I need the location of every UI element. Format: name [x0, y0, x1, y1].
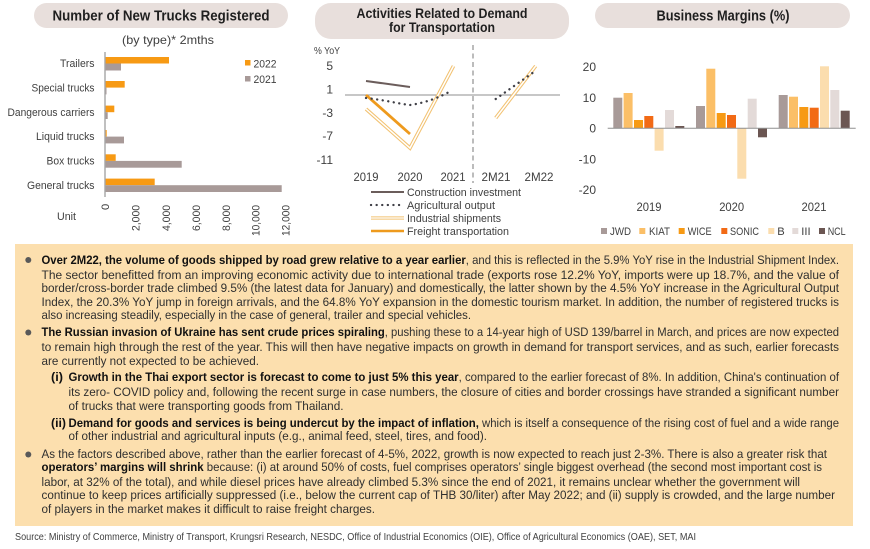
sub-point ii: inflation: (ii): [51, 416, 66, 430]
legend: margins: WICE: [688, 226, 712, 238]
heading: Activities Related to Demand for Transportation: [315, 3, 569, 39]
line chart: activities: 2M21: [482, 170, 511, 184]
bullet 3: growth outlook and margins: [25, 447, 835, 516]
bullet 1: road freight volume: Index, the 20.3% YoY jump in foreign arrivals, and the 64.8% YoY expansion in the domestic tourism market. In addition, the number of registered trucks is: [42, 295, 839, 309]
line chart: activities: 2019: [354, 170, 379, 184]
heading: Business Margins: [595, 3, 850, 28]
heading: Activities Related to Demand for Transportation: for Transportation: [389, 20, 495, 35]
bar chart: margins: 2019: [636, 200, 662, 214]
bar chart: trucks by type: Special trucks: [32, 82, 95, 94]
bar chart: margins: 2020: [719, 200, 744, 214]
sub-point ii: inflation: Demand for goods and services is being undercut by the impact of inflation, which is itself a consequence of the rising cost of fuel and a wide range: [68, 416, 839, 430]
bullet 1: road freight volume: border/cross-border trade climbed 9.5% (the latest data for January) and domestically, the latter shown by the 4.5% YoY increase in the Agricultural Output: [42, 281, 840, 295]
heading: Number of New Trucks Registered: [34, 3, 288, 28]
heading: Number of New Trucks Registered: Number of New Trucks Registered: [52, 8, 270, 24]
bar chart: trucks by type: 2,000: [130, 205, 142, 231]
subtitle: by type: (by type)* 2mths: [122, 33, 214, 47]
source note: Source: Ministry of Commerce, Ministry of Transport, Krungsri Research, NESDC, Office of Industrial Economics (OIE), Office of Agricultural Economics (OAE), SET, MAI: [15, 531, 696, 543]
bar chart: margins: 0: [589, 122, 596, 136]
bar chart: trucks by type: Liquid trucks: [36, 131, 95, 143]
bar chart: trucks by type: 0: [100, 204, 112, 210]
bullet 3: growth outlook and margins: continue to keep prices artificially suppressed (i.e., below the current cap of THB 30/liter) after May 2022; and (ii) supply is crowded, and the large number: [42, 488, 835, 502]
panel: new trucks registered: [8, 3, 292, 236]
sub-point ii: inflation: of other industrial and agricultural inputs (e.g., animal feed, steel, tires, and food).: [68, 429, 487, 443]
panel: business margins: [579, 3, 856, 238]
sub-point i: Thai exports: Growth in the Thai export sector is forecast to come to just 5% this year, compared to the earlier forecast of 8%. In addition, China's continuation of: [68, 370, 840, 384]
legend: margins: JWD: [610, 226, 631, 238]
series: construction investment: [366, 81, 410, 87]
bar chart: trucks by type: 8,000: [221, 205, 233, 231]
bullet 2: Russian invasion and crude prices: to remain high through the rest of the year. This will then have negative impacts on growth in demand for transport services, and as such, earlier forecasts: [42, 340, 839, 354]
heading: Business Margins: Business Margins (%): [656, 8, 790, 24]
bar chart: trucks by type: [8, 52, 292, 236]
line chart: activities: 2021: [440, 170, 466, 184]
bar chart: margins: -20: [579, 183, 596, 197]
sub-point i: Thai exports: (i): [51, 370, 63, 384]
panel: commentary text: [15, 244, 853, 526]
bar chart: margins: 2021: [802, 200, 827, 214]
line chart: activities: 2M22: [524, 170, 554, 184]
panel: activities related to demand: [314, 3, 569, 238]
legend: activities: Freight transportation: [407, 226, 509, 238]
bullet 1: road freight volume: [25, 253, 840, 322]
bullet 3: growth outlook and margins: As the factors described above, rather than the earlier forecast of 4-5%, 2022, growth is now expected to reach just 2-3%. There is also a greater risk that: [42, 447, 828, 461]
bar chart: trucks by type: 10,000: [250, 205, 262, 236]
bar chart: trucks by type: 6,000: [191, 205, 203, 231]
bullet 2: Russian invasion and crude prices: are currently not expected to be achieved.: [42, 354, 259, 368]
line chart: activities: % YoY: [314, 46, 340, 57]
bullet 3: growth outlook and margins: operators’ margins will shrink because: (i) at around 50% of costs, fuel comprises operators’ single biggest overhead (the second most important cost is: [42, 460, 822, 474]
legend: trucks years: [245, 58, 276, 86]
bullet 3: growth outlook and margins: labor, at 32% of the total), and while diesel prices have already climbed 5.3% since the end of 2021, it remains unclear whether the government will: [42, 475, 800, 489]
line chart: activities: -7: [322, 129, 333, 143]
line chart: activities: 5: [326, 59, 333, 73]
bar chart: trucks by type: Dangerous carriers: [8, 107, 95, 119]
heading: Activities Related to Demand for Transportation: Activities Related to Demand: [356, 6, 528, 21]
legend: activities: Agricultural output: [407, 200, 496, 212]
bar chart: margins: 20: [583, 60, 596, 74]
bullet 2: Russian invasion and crude prices: [25, 325, 839, 368]
legend: activities: Construction investment: [407, 187, 522, 199]
line chart: activities: [314, 45, 560, 184]
series: industrial shipments: [366, 66, 536, 148]
bullet 1: road freight volume: also increasing steadily, especially in the case of general, trailer and special vehicles.: [42, 308, 471, 322]
bullet 1: road freight volume: The sector benefitted from an improving economic activity due to international trade (exports rose 12.2% YoY, imports were up 18.7%, and the value of: [42, 268, 840, 282]
legend: margins: [601, 226, 846, 238]
bar chart: trucks by type: Box trucks: [46, 156, 95, 168]
line chart: activities: 1: [326, 82, 333, 96]
bar chart: trucks by type: Trailers: [60, 58, 95, 70]
series: freight transportation: [366, 95, 410, 134]
bar chart: trucks by type: Unit: [57, 211, 77, 223]
legend: margins: SONIC: [730, 226, 759, 238]
bar chart: trucks by type: 4,000: [161, 205, 173, 231]
legend: margins: III: [801, 226, 811, 238]
bar chart: trucks by type: General trucks: [27, 180, 95, 192]
bullet 3: growth outlook and margins: of players in the market makes it difficult to raise freight charges.: [42, 502, 375, 516]
bar chart: margins: 10: [583, 91, 596, 105]
legend: margins: B: [777, 226, 785, 238]
legend: activities: Industrial shipments: [407, 213, 501, 225]
sub-point ii: inflation: [51, 416, 839, 443]
line chart: activities: -11: [317, 153, 333, 167]
bullet 1: road freight volume: Over 2M22, the volume of goods shipped by road grew relative to a year earlier, and this is reflected in the 5.9% YoY rise in the Industrial Shipment Index.: [42, 253, 839, 267]
legend: margins: NCL: [828, 226, 846, 238]
sub-point i: Thai exports: of trucks that were transporting goods from Thailand.: [68, 399, 344, 413]
series: agricultural output: [366, 71, 536, 105]
sub-point i: Thai exports: its zero- COVID policy and, following the recent surge in case numbers, the closure of cities and border crossings have stranded a significant number: [68, 385, 839, 399]
bars: 2021: [779, 66, 850, 128]
sub-point i: Thai exports: [51, 370, 840, 413]
bar chart: margins: -10: [579, 152, 596, 166]
legend: activities: [371, 187, 522, 238]
legend: trucks years: 2022: [254, 58, 276, 70]
bar chart: trucks by type: 12,000: [280, 205, 292, 236]
bars: 2020: [696, 69, 767, 179]
bars: 2019: [613, 93, 684, 151]
line chart: activities: 2020: [398, 170, 423, 184]
line chart: activities: -3: [322, 106, 333, 120]
bullet 2: Russian invasion and crude prices: The Russian invasion of Ukraine has sent crude prices spiraling, pushing these to a 14-year high of USD 139/barrel in March, and prices are now expected: [42, 325, 839, 339]
bar chart: margins: [579, 60, 856, 214]
legend: margins: KIAT: [649, 226, 670, 238]
legend: trucks years: 2021: [254, 74, 276, 86]
